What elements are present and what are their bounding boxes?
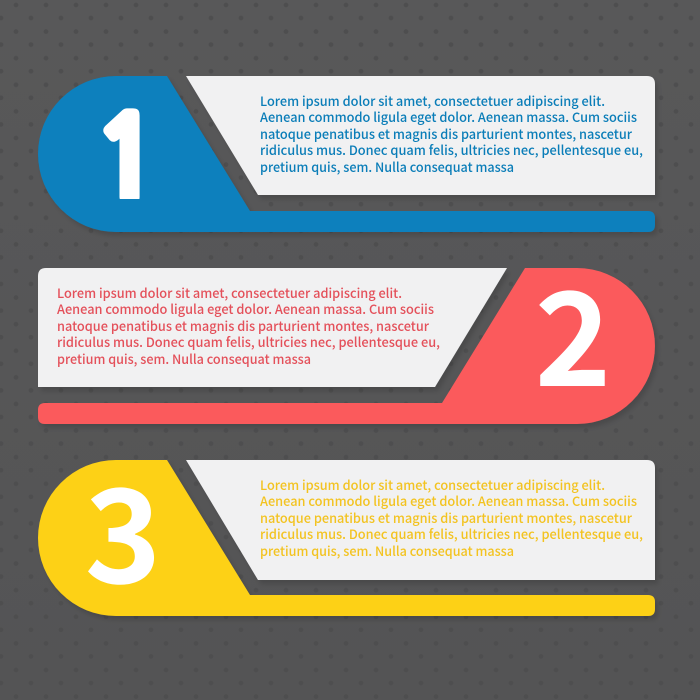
white text card 3 (186, 460, 655, 580)
text block 3: Aenean commodo ligula eget dolor. Aenean massa. Cum sociis (260, 491, 637, 510)
panel: step 3 (38, 433, 655, 621)
number 1: 1 (93, 103, 161, 215)
text block 3: pretium quis, sem. Nulla consequat massa (260, 541, 514, 560)
text block 3: ridiculus mus. Donec quam felis, ultricies nec, pellentesque eu, (260, 524, 643, 543)
text block 1: ridiculus mus. Donec quam felis, ultricies nec, pellentesque eu, (260, 140, 643, 159)
text block 2: Lorem ipsum dolor sit amet, consectetuer adipiscing elit. (57, 283, 402, 302)
text block 2 (57, 283, 440, 368)
text block 3 (260, 475, 643, 560)
panel: step 2 (38, 236, 655, 424)
text block 1: Lorem ipsum dolor sit amet, consectetuer adipiscing elit. (260, 91, 605, 110)
text block 3: natoque penatibus et magnis dis parturient montes, nascetur (260, 508, 633, 527)
number 2: 2 (535, 236, 611, 424)
white text card 2 (38, 268, 507, 387)
text block 2: natoque penatibus et magnis dis parturient montes, nascetur (57, 316, 430, 335)
yellow tab shape (38, 460, 655, 616)
number 3: 3 (85, 433, 161, 621)
blue tab shape (38, 76, 655, 232)
text block 1 (260, 91, 643, 176)
text block 1: pretium quis, sem. Nulla consequat massa (260, 157, 514, 176)
text block 3: Lorem ipsum dolor sit amet, consectetuer adipiscing elit. (260, 475, 605, 494)
panel: step 1 (38, 76, 655, 232)
text block 1: natoque penatibus et magnis dis parturient montes, nascetur (260, 124, 633, 143)
text block 2: pretium quis, sem. Nulla consequat massa (57, 349, 311, 368)
text block 1: Aenean commodo ligula eget dolor. Aenean massa. Cum sociis (260, 107, 637, 126)
text block 2: Aenean commodo ligula eget dolor. Aenean massa. Cum sociis (57, 299, 434, 318)
white text card 1 (186, 76, 655, 195)
red tab shape (38, 268, 655, 424)
text block 2: ridiculus mus. Donec quam felis, ultricies nec, pellentesque eu, (57, 332, 440, 351)
